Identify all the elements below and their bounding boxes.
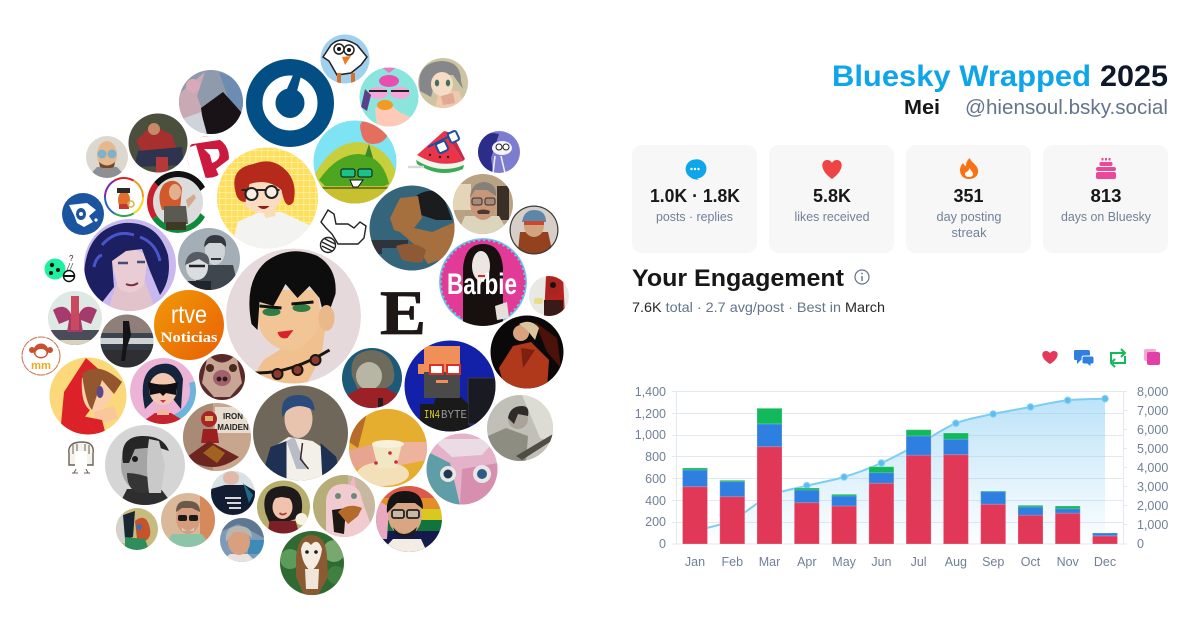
left axis labels: 1,400 [635, 385, 666, 399]
avatar: bald man with glasses [86, 136, 128, 178]
avatar: rtve Noticias logo [154, 290, 224, 360]
month labels: Jul [911, 555, 927, 569]
avatar: rainbow ring toy [98, 171, 150, 223]
avatar: dark comic art [179, 70, 243, 134]
avatar: tea cup and hands [349, 409, 427, 487]
stacked bars [682, 408, 1118, 544]
bar and line chart: monthly engagement [635, 385, 1168, 569]
avatar: deadpool [529, 276, 569, 316]
avatar: Iron Maiden doll [183, 403, 251, 471]
month labels: Oct [1021, 555, 1041, 569]
panel: likes received: 5.8K [813, 186, 851, 206]
panel: day posting streak: day posting [936, 210, 1002, 224]
panel: posts and replies [632, 145, 757, 253]
panel: day posting streak [906, 145, 1031, 253]
user name and handle: Mei [904, 97, 940, 119]
avatar: couple sketch [178, 228, 240, 290]
avatar: pixel art man on blue: BYTE [441, 408, 467, 422]
month labels: Nov [1057, 555, 1080, 569]
avatar: masked superhero girl [130, 358, 197, 424]
month labels: Jun [871, 555, 892, 569]
avatar: beach silhouette [100, 314, 154, 368]
avatar: furby [359, 67, 419, 127]
avatar: man with glasses on pride flag [376, 486, 442, 552]
right axis labels: 1,000 [1137, 518, 1168, 532]
left axis labels: 0 [659, 537, 666, 551]
month labels: Sep [982, 555, 1004, 569]
avatar: black and white man covering eye [105, 425, 185, 505]
avatar: Iron Maiden doll: IRON [223, 412, 243, 421]
left axis labels [635, 385, 666, 551]
icon: flame [960, 158, 978, 179]
avatar: pixel art man on blue [404, 340, 496, 432]
user name and handle: @hiensoul.bsky.social [965, 97, 1168, 119]
avatar: close-up dog [199, 354, 245, 400]
panel: likes received [769, 145, 894, 253]
avatar: rtve Noticias logo: Noticias [160, 330, 218, 346]
icon: chat bubble [686, 159, 706, 180]
panel: days on Bluesky: days on Bluesky [1061, 210, 1152, 224]
icon: line-drawn cat with yarn [320, 210, 366, 252]
avatar: red P logo [187, 136, 229, 178]
avatar: blue-haired person [252, 385, 348, 481]
avatar: Barbie Morticia: Barbie [447, 268, 517, 301]
month labels: Apr [797, 555, 817, 569]
avatar: purple-haired portrait [84, 219, 176, 311]
heading: Your Engagement: Your Engagement [632, 265, 844, 292]
title: Bluesky Wrapped [832, 60, 1091, 93]
avatar: pink unicorn with food [313, 475, 376, 537]
avatar: main profile cartoon [226, 248, 361, 386]
avatar: red-cloaked painting [128, 113, 188, 173]
avatar: monkey logo badge [22, 337, 60, 375]
avatar: Iron Maiden doll: MAIDEN [217, 423, 249, 432]
month labels: May [832, 555, 857, 569]
avatar: El Espanol E logo: E [380, 277, 426, 348]
right axis labels [1137, 385, 1168, 551]
icon: legend quotes [1144, 349, 1160, 365]
avatar bubble cluster [22, 34, 569, 595]
avatar: simple line-drawn owl on blue [320, 34, 370, 84]
panel: likes received: likes received [794, 210, 870, 224]
month labels: Aug [945, 555, 967, 569]
avatar: grey-haired woman at sea [220, 518, 264, 562]
avatar: pink dress figure [48, 291, 102, 346]
avatar: selfie with flag ring [147, 171, 209, 233]
left axis labels: 1,000 [635, 428, 666, 442]
avatar: curly red-hair cartoon on yellow grid [216, 147, 318, 249]
panel: day posting streak: 351 [954, 186, 984, 206]
panel: posts and replies: 1.0K · 1.8K [650, 186, 740, 206]
avatar: black shirt with text [211, 471, 255, 515]
avatar: Barbie Morticia [439, 238, 527, 326]
icon: legend heart [1042, 351, 1058, 364]
avatar: pixel art man on blue: IN4 [424, 408, 440, 422]
right axis labels: 0 [1137, 537, 1144, 551]
icon: legend replies [1074, 350, 1094, 367]
avatar: rtve Noticias logo: rtve [171, 301, 207, 329]
left axis labels: 1,200 [635, 407, 666, 421]
avatar: child painting on teal [342, 348, 402, 408]
chart legend icons [1042, 349, 1160, 367]
avatar: woman with gun painting [369, 185, 455, 271]
panel: posts and replies: posts · replies [656, 210, 733, 224]
avatar: blue swirl logo [62, 193, 104, 235]
avatar: barn owl [280, 531, 345, 595]
avatar: green blob with question mark [44, 254, 74, 282]
right axis labels: 3,000 [1137, 480, 1168, 494]
panel: days on Bluesky: 813 [1090, 186, 1122, 206]
avatar: green abstract painting [116, 508, 158, 550]
right axis labels: 7,000 [1137, 404, 1168, 418]
right axis labels: 2,000 [1137, 499, 1168, 513]
left axis labels: 600 [645, 472, 666, 486]
avatar: red dress painting [490, 315, 564, 389]
avatar: guitar player black and white [487, 395, 553, 461]
month labels [685, 555, 1116, 569]
icon: heart [822, 160, 842, 179]
month labels: Jan [685, 555, 705, 569]
avatar: green hill game character [313, 120, 397, 204]
avatar: cartoon fighter pilot [509, 205, 559, 255]
avatar: blue ring logo [246, 59, 334, 147]
avatar: curly-haired illustrated girl [256, 480, 310, 534]
avatar: red riding hood cartoon [49, 357, 127, 435]
icon: legend reposts [1111, 349, 1125, 367]
avatar: anime girl [418, 58, 468, 108]
avatar: monkey logo badge: mm [31, 360, 51, 372]
panel: days on Bluesky [1043, 145, 1168, 253]
panel: day posting streak: streak [952, 226, 987, 240]
avatar: purple cartoon [478, 131, 520, 173]
avatar: green blob with question mark: ? [69, 254, 74, 263]
avatar: man with glasses and moustache [453, 174, 513, 234]
engagement summary: 7.6K total · 2.7 avg/post · Best in March [632, 299, 885, 315]
right axis labels: 6,000 [1137, 423, 1168, 437]
right axis labels: 8,000 [1137, 385, 1168, 399]
month labels: Dec [1094, 555, 1116, 569]
month labels: Feb [722, 555, 743, 569]
right axis labels: 5,000 [1137, 442, 1168, 456]
title: 2025 [1100, 60, 1168, 93]
avatar: pink and teal eyes painting [426, 433, 498, 505]
icon: birthday cake [1096, 158, 1116, 179]
icon: info [855, 270, 869, 284]
icon: small girl doodle [69, 442, 93, 473]
left axis labels: 800 [645, 450, 666, 464]
right axis labels: 4,000 [1137, 461, 1168, 475]
left axis labels: 400 [645, 494, 666, 508]
left axis labels: 200 [645, 515, 666, 529]
cumulative area and line [695, 395, 1108, 544]
month labels: Mar [759, 555, 780, 569]
avatar: man with sunglasses [161, 493, 216, 547]
avatar: watermelon with glasses [408, 130, 465, 173]
